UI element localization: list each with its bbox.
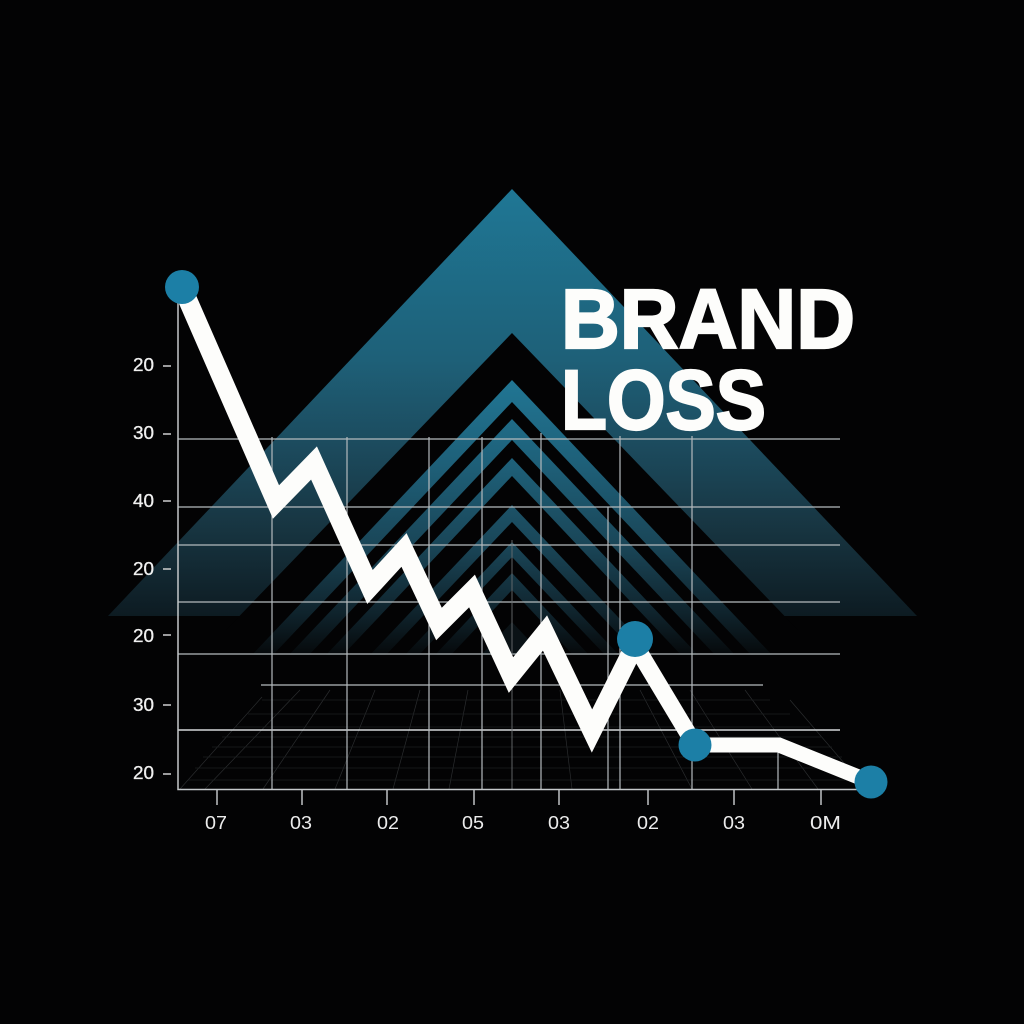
y axis labels: 40: [133, 491, 154, 511]
y axis labels: [133, 355, 154, 783]
large teal pyramid: [108, 189, 917, 616]
data point: start: [165, 270, 199, 304]
x axis labels: 05: [462, 813, 484, 833]
title: Brand Loss: BRAND: [561, 272, 855, 366]
chart axes: [178, 300, 872, 790]
y axis labels: 20: [133, 559, 154, 579]
x axis labels: 03: [723, 813, 745, 833]
chart grid lines: [178, 433, 840, 789]
y axis labels: 20: [133, 626, 154, 646]
x axis labels: 03: [290, 813, 312, 833]
y axis labels: 20: [133, 763, 154, 783]
declining white trend line: [186, 296, 871, 782]
title: Brand Loss: LOSS: [561, 353, 766, 447]
x axis ticks: [217, 790, 821, 805]
perspective floor grid: [180, 690, 858, 789]
data point: rebound: [617, 621, 653, 657]
x axis labels: 07: [205, 813, 227, 833]
x axis labels: 03: [548, 813, 570, 833]
data point: end: [854, 766, 888, 798]
title: Brand Loss: [561, 272, 855, 447]
x axis labels: [205, 813, 841, 833]
x axis labels: 02: [377, 813, 399, 833]
y axis labels: 30: [133, 423, 154, 443]
x axis labels: 0M: [810, 813, 841, 833]
inner black pyramid: [226, 333, 798, 630]
x axis labels: 02: [637, 813, 659, 833]
data point: plateau: [678, 728, 712, 762]
y axis labels: 20: [133, 355, 154, 375]
y axis labels: 30: [133, 695, 154, 715]
y axis ticks: [163, 366, 171, 774]
nested chevrons: [252, 380, 772, 655]
